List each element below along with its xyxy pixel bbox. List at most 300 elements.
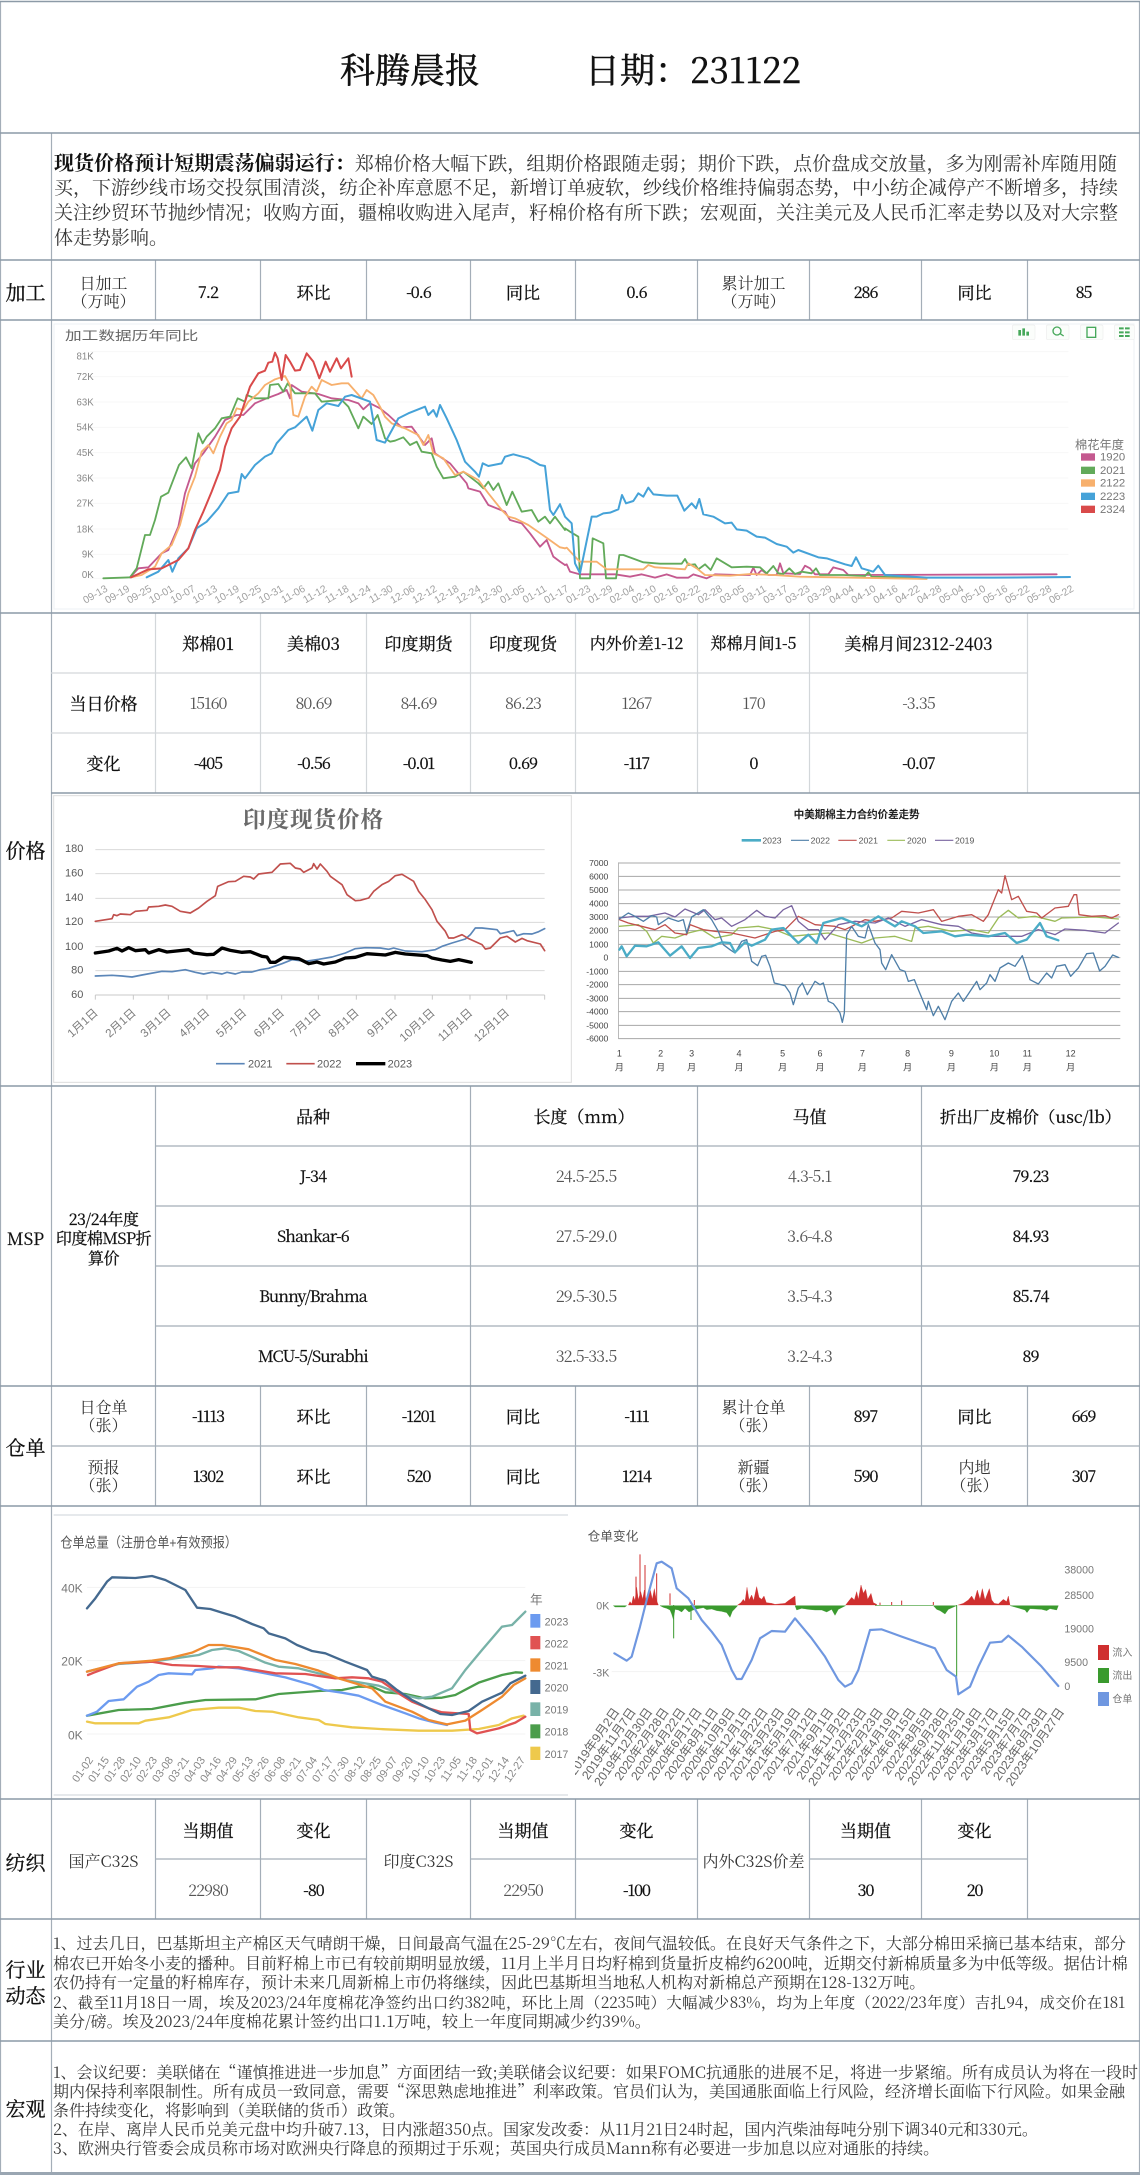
- panel: MSP table: 84.93: [1013, 1224, 1048, 1247]
- axes: 5月1日: [214, 1006, 249, 1040]
- x axis date labels: 11-12: [301, 584, 329, 606]
- axes: 2000: [589, 926, 609, 936]
- legend: 棉花年度: [1075, 437, 1124, 452]
- axes: 12-01: [470, 1755, 496, 1785]
- axes: 2021年1月22日: [711, 1705, 771, 1783]
- panel: warehouse receipt table: （张）: [950, 1473, 998, 1496]
- axes: -1000: [586, 966, 609, 976]
- MSP description: 算价: [88, 1246, 119, 1269]
- panel: warehouse receipt table: 预报: [87, 1454, 120, 1478]
- axes: 2022年2月23日: [826, 1705, 886, 1783]
- legend: 流入: [1112, 1646, 1132, 1659]
- chart title: 加工数据历年同比: [65, 329, 198, 343]
- axes: 5: [780, 1049, 785, 1059]
- panel: processing row: 286: [854, 280, 877, 303]
- axes: 2021年3月23日: [727, 1705, 787, 1783]
- legend: 2021: [248, 1058, 272, 1070]
- axes: 2019年12月30日: [591, 1705, 655, 1789]
- y axis gridlines and labels: 0K: [82, 570, 94, 581]
- x axis date labels: 09-25: [125, 584, 154, 606]
- axes: 1: [617, 1049, 622, 1059]
- panel: warehouse receipt table: （张）: [729, 1413, 778, 1436]
- axes: 2021年9月1日: [780, 1705, 836, 1777]
- MSP description: [56, 1207, 152, 1269]
- axes: 月: [990, 1063, 999, 1073]
- axes: 月: [615, 1063, 624, 1073]
- x axis date labels: 12-18: [433, 584, 461, 606]
- panel: textile table: 内外C32S价差: [703, 1849, 804, 1872]
- price table: -3.35: [902, 691, 935, 714]
- panel: MSP table: MCU-5/Surabhi: [258, 1344, 368, 1367]
- axes: 08-25: [358, 1755, 384, 1785]
- line chart: India spot price: [53, 795, 572, 1083]
- x axis date labels: 10-19: [213, 584, 242, 606]
- section label: industry news: [6, 1954, 46, 2009]
- axes: 2022年11月25日: [905, 1705, 968, 1788]
- series 2019: [619, 906, 1118, 940]
- panel: processing row: -0.6: [406, 280, 431, 303]
- series 2023: [619, 916, 1058, 958]
- chart title: 印度现货价格: [243, 803, 383, 835]
- axes: 4: [736, 1049, 742, 1059]
- legend: 2019: [955, 835, 974, 845]
- axes: [566, 1564, 1094, 1789]
- panel: textile table: 变化: [958, 1817, 992, 1842]
- price table: -0.56: [297, 751, 330, 774]
- legend: [1075, 437, 1125, 516]
- series 2020: [87, 1576, 525, 1715]
- x axis date labels: 12-24: [454, 584, 483, 606]
- x axis date labels: 04-16: [872, 584, 900, 606]
- axes: 2021年12月23日: [805, 1705, 869, 1789]
- price table: -117: [624, 751, 649, 774]
- text block: macro news: 2、在岸、离岸人民币兑美元盘中均升破7.13，日内涨超350点。国家发改委：从11月21日24时起，国内汽柴油每吨分别下调340元和330元。: [53, 2117, 1038, 2140]
- panel: warehouse receipt table: 新疆: [737, 1454, 770, 1478]
- y axis gridlines and labels: 81K: [76, 351, 94, 362]
- axes: [65, 843, 545, 1045]
- summary text block: 体走势影响。: [54, 223, 168, 250]
- axes: 月: [947, 1063, 956, 1073]
- axes: 6月1日: [251, 1006, 287, 1040]
- axes: 8: [905, 1049, 910, 1059]
- report date: 日期：231122: [585, 44, 801, 94]
- section label: industry news: 行业: [6, 1954, 46, 1983]
- axes: 01-02: [70, 1755, 96, 1785]
- axes: 9500: [1064, 1657, 1088, 1669]
- axes: 03-21: [166, 1755, 192, 1785]
- legend: 1920: [1100, 452, 1125, 464]
- axes: 2021年7月12日: [760, 1705, 820, 1783]
- axes: 7月1日: [288, 1006, 324, 1040]
- text block: industry news: 美分/磅。埃及2023/24年度棉花累计签约出口1.1万吨，较上一年度同期减少约39%。: [53, 2009, 651, 2032]
- price table: 15160: [190, 691, 226, 714]
- legend: 2023: [762, 835, 782, 845]
- x axis date labels: 06-22: [1047, 584, 1076, 606]
- panel: textile table: -100: [623, 1878, 650, 1901]
- axes: 05-13: [230, 1755, 256, 1785]
- axes: 1月1日: [65, 1006, 101, 1040]
- price table: 0.69: [509, 751, 537, 774]
- axes: 8月1日: [326, 1006, 362, 1040]
- axes: 2023年7月7日: [978, 1705, 1034, 1777]
- price table: 80.69: [296, 691, 332, 714]
- panel: warehouse receipt table: 同比: [506, 1403, 540, 1428]
- panel: warehouse receipt table: 环比: [296, 1403, 330, 1428]
- axes: 月: [656, 1063, 665, 1073]
- axes: 9: [949, 1049, 954, 1059]
- panel: textile table: 印度C32S: [384, 1849, 453, 1872]
- x axis date labels: 01-17: [542, 584, 571, 606]
- legend: 仓单: [1112, 1693, 1132, 1706]
- panel: textile table: 22980: [188, 1878, 228, 1901]
- text block: macro news: [53, 2060, 1138, 2159]
- text block: macro news: 1、会议纪要：美联储在“谨慎推进进一步加息”方面团结一致;美联储会议纪要：如果FOMC抗通胀的进展不足，将进一步紧缩。所有成员认为将在一段时: [53, 2060, 1138, 2083]
- panel: MSP table: 3.5-4.3: [787, 1284, 832, 1307]
- legend: 2020: [545, 1683, 568, 1695]
- summary text block: 买，下游纱线市场交投氛围清淡，纺企补库意愿不足，新增订单疲软，纱线价格维持偏弱态势，中小纺企减停产不断增多，持续: [54, 173, 1118, 200]
- section label: textile: 纺织: [6, 1847, 46, 1876]
- axes: 3月1日: [138, 1006, 174, 1040]
- panel: MSP table: Bunny/Brahma: [259, 1284, 367, 1307]
- panel: warehouse receipt table: （张）: [79, 1413, 128, 1436]
- x axis date labels: 10-01: [147, 584, 176, 606]
- panel: warehouse receipt table: 同比: [958, 1403, 992, 1428]
- price table: 当日价格: [70, 690, 138, 715]
- x axis date labels: 09-13: [81, 584, 110, 606]
- x axis date labels: 01-23: [564, 584, 593, 606]
- MSP description: 23/24年度: [69, 1207, 138, 1230]
- axes: 月: [815, 1063, 825, 1073]
- x axis date labels: 12-12: [411, 584, 439, 606]
- axes: 1000: [589, 939, 609, 949]
- panel: textile table: 当期值: [840, 1817, 891, 1842]
- axes: 2021年5月19日: [743, 1705, 803, 1783]
- x axis date labels: 01-29: [586, 584, 615, 606]
- y axis gridlines and labels: 45K: [76, 448, 94, 459]
- legend: 2022: [317, 1058, 341, 1070]
- series lines: [619, 876, 1118, 1022]
- panel: textile table: [6, 1817, 992, 1901]
- price table: 84.69: [401, 691, 436, 714]
- price table: 170: [742, 691, 765, 714]
- panel: textile table: 国产C32S: [69, 1849, 138, 1872]
- y axis gridlines and labels: 18K: [76, 524, 94, 535]
- axes: 月: [1066, 1063, 1075, 1073]
- x axis date labels: 11-30: [367, 584, 395, 606]
- panel: warehouse receipt table: -111: [624, 1404, 649, 1427]
- x axis date labels: 02-10: [630, 584, 659, 606]
- y axis gridlines and labels: 63K: [76, 397, 94, 408]
- legend: 2021: [859, 835, 878, 845]
- series 2122: [131, 376, 927, 579]
- axes: 10-10: [406, 1755, 432, 1785]
- panel: processing row: （万吨）: [721, 289, 786, 312]
- axes: -2000: [586, 980, 609, 990]
- section label: macro: 宏观: [6, 2093, 46, 2122]
- x axis date labels: 11-18: [323, 584, 351, 606]
- x axis date labels: 02-28: [696, 584, 725, 606]
- axes: 4月1日: [177, 1006, 212, 1040]
- x axis date labels: 01-05: [498, 584, 527, 606]
- legend: [742, 835, 974, 845]
- legend: 2017: [545, 1749, 568, 1761]
- x axis date labels: 05-16: [981, 584, 1010, 606]
- x axis date labels: 03-05: [718, 584, 747, 606]
- axes: 80: [71, 965, 83, 977]
- axes: 2: [658, 1049, 663, 1059]
- panel: textile table: -80: [303, 1878, 324, 1901]
- series 2023: [87, 1667, 447, 1725]
- axes: 5000: [589, 885, 609, 895]
- price table: 内外价差1-12: [590, 631, 683, 654]
- series 2022: [95, 863, 545, 951]
- axes: -6000: [586, 1034, 609, 1044]
- series 1920: [130, 385, 1057, 578]
- section label: warehouse receipts: 仓单: [6, 1432, 46, 1461]
- x axis date labels: 04-04: [828, 584, 856, 606]
- price table: [70, 630, 993, 775]
- x axis date labels: 10-31: [257, 584, 286, 606]
- axes: 120: [65, 916, 83, 928]
- panel: warehouse receipt table: 环比: [296, 1463, 330, 1488]
- panel: warehouse receipt table: 1214: [622, 1464, 651, 1487]
- x axis date labels: 12-06: [389, 584, 417, 606]
- axes: 2023年10月27日: [1003, 1705, 1067, 1789]
- text block: industry news: 2、截至11月18日一周，埃及2023/24年度棉花净签约出口约382吨，环比上周（2235吨）大幅减少83%，均为上年度（2022/23年度）吉扎94，成交价在181: [53, 1991, 1125, 2013]
- legend: 2021: [1100, 465, 1125, 477]
- panel: warehouse receipt table: 累计仓单: [721, 1394, 786, 1418]
- panel: warehouse receipt table: 590: [854, 1464, 877, 1487]
- legend: 2019: [545, 1705, 568, 1717]
- x axis date labels: 04-22: [894, 584, 922, 606]
- price table: 郑棉01: [182, 630, 234, 655]
- panel: textile table: 变化: [620, 1817, 654, 1842]
- x axis date labels: 05-28: [1025, 584, 1054, 606]
- axes: 100: [65, 941, 83, 953]
- series 2021: [103, 383, 927, 578]
- price table: -0.07: [902, 751, 935, 774]
- axes: 140: [65, 892, 83, 904]
- x axis date labels: 10-25: [235, 584, 264, 606]
- panel: textile table: 30: [858, 1878, 873, 1901]
- panel: processing row: 同比: [958, 279, 992, 304]
- axes: 2020年6月17日: [645, 1705, 705, 1783]
- panel: MSP table: 85.74: [1013, 1284, 1048, 1307]
- axes: 06-08: [262, 1755, 288, 1785]
- axes: 180: [65, 843, 83, 855]
- section label: industry news: 动态: [6, 1980, 46, 2009]
- text block: macro news: 期内保持利率限制性。所有成员一致同意，需要“深思熟虑地推进”利率政策。官员们认为，美国通胀面临上行风险，经济增长面临下行风险。如果金融: [53, 2079, 1125, 2102]
- panel: warehouse receipt table: 内地: [958, 1454, 990, 1478]
- series 2017: [87, 1708, 524, 1731]
- y axis gridlines and labels: [76, 351, 1068, 581]
- report name: 科腾晨报: [340, 44, 480, 94]
- price table: 美棉月间2312-2403: [844, 630, 993, 655]
- x axis date labels: [81, 584, 1076, 606]
- y axis gridlines and labels: 27K: [76, 499, 94, 510]
- axes: 02-23: [134, 1755, 160, 1785]
- summary text block: 关注纱贸环节抛纱情况；收购方面，疆棉收购进入尾声，籽棉价格有所下跌；宏观面，关注美元及人民币汇率走势以及对大宗整: [54, 198, 1118, 225]
- price table: 郑棉月间1-5: [710, 631, 796, 654]
- legend: 2023: [545, 1616, 568, 1628]
- series 2022: [619, 910, 1118, 1022]
- axes: 07-04: [294, 1755, 320, 1785]
- axes: 月: [858, 1063, 867, 1073]
- panel: MSP table: 长度（mm）: [533, 1103, 635, 1128]
- x axis date labels: 12-30: [476, 584, 505, 606]
- series 2021: [87, 1645, 525, 1724]
- series 2018: [87, 1672, 522, 1716]
- legend: 2023: [388, 1058, 412, 1070]
- title: [340, 44, 801, 94]
- axes: 月: [687, 1063, 696, 1073]
- axes: 10月1日: [397, 1006, 438, 1045]
- axes: 0: [604, 953, 609, 963]
- panel: MSP table: 79.23: [1013, 1164, 1048, 1187]
- line chart: historical processing data: [54, 324, 1134, 610]
- axes: 01-28: [102, 1755, 128, 1785]
- axes: 11月1日: [435, 1006, 475, 1044]
- axes: -4000: [586, 1007, 609, 1017]
- panel: MSP table: 品种: [296, 1103, 330, 1128]
- axes: 月: [778, 1063, 787, 1073]
- price table: -405: [194, 751, 222, 774]
- axes: 4000: [589, 899, 609, 909]
- axes: 3: [689, 1049, 694, 1059]
- axes: 11: [1023, 1049, 1032, 1059]
- panel: processing row: [6, 270, 1092, 312]
- price table: 86.23: [505, 691, 541, 714]
- panel: MSP table: 89: [1023, 1344, 1038, 1367]
- axes: 2023年3月17日: [941, 1705, 1001, 1783]
- panel: warehouse receipt table: 日仓单: [79, 1394, 128, 1418]
- x axis date labels: 09-19: [103, 584, 132, 606]
- legend: 年: [530, 1593, 543, 1607]
- axes: 60: [71, 989, 83, 1001]
- price table: 变化: [86, 750, 120, 775]
- x axis date labels: 11-06: [280, 584, 308, 606]
- MSP description: 印度棉MSP折: [56, 1226, 151, 1249]
- axes: 0: [1064, 1681, 1070, 1693]
- axes: 08-12: [342, 1755, 368, 1785]
- outflow bars: [613, 1605, 1058, 1677]
- series 2022: [88, 1662, 525, 1733]
- panel: warehouse receipt table: -1201: [402, 1404, 435, 1427]
- axes: 160: [65, 868, 83, 880]
- axes: 2022年6月15日: [859, 1705, 919, 1783]
- panel: textile table: 20: [967, 1878, 982, 1901]
- price table: 美棉03: [287, 630, 340, 655]
- panel: textile table: 22950: [503, 1878, 543, 1901]
- price table: 印度现货: [489, 630, 557, 655]
- axes: 2022年9月28日: [892, 1705, 952, 1783]
- panel: MSP table: Shankar-6: [277, 1224, 349, 1247]
- inflow bars: [628, 1554, 1010, 1605]
- panel: MSP table: [7, 1103, 1121, 1367]
- panel: warehouse receipt table: [6, 1394, 1096, 1496]
- y axis gridlines and labels: 54K: [76, 423, 94, 434]
- axes: 07-17: [310, 1755, 336, 1785]
- panel: warehouse receipt table: （张）: [79, 1473, 128, 1496]
- x axis date labels: 04-28: [915, 584, 944, 606]
- axes: 28500: [1064, 1590, 1094, 1602]
- warehouse receipts line: [614, 1562, 1058, 1694]
- panel: processing row: 环比: [296, 279, 330, 304]
- axes: 04-29: [214, 1755, 240, 1785]
- price table: 0: [750, 751, 757, 774]
- price table: 1267: [621, 691, 652, 714]
- legend: 2022: [545, 1638, 568, 1650]
- panel: warehouse receipt table: 同比: [506, 1463, 540, 1488]
- axes: 06-21: [278, 1755, 304, 1785]
- legend: 2122: [1100, 478, 1125, 490]
- chart title: 仓单总量（注册仓单+有效预报）: [60, 1535, 237, 1551]
- panel: MSP table: 29.5-30.5: [556, 1284, 616, 1307]
- panel: textile table: 当期值: [182, 1817, 234, 1842]
- text block: industry news: 棉农已开始冬小麦的播种。目前籽棉上市已有较前期明显放缓，11月上半月日均籽棉到货量折皮棉约6200吨，近期交付新棉质量多为中低等级。据估计棉: [53, 1951, 1128, 1974]
- axes: 2月1日: [103, 1006, 139, 1040]
- toolbar icons: [1012, 325, 1134, 340]
- axes: [586, 858, 1120, 1073]
- series 2023: [95, 948, 471, 964]
- axes: 19000: [1064, 1623, 1094, 1635]
- legend: 2018: [545, 1727, 568, 1739]
- section label: processing: 加工: [6, 277, 46, 306]
- legend: 流出: [1112, 1669, 1132, 1682]
- panel: MSP table: 24.5-25.5: [556, 1164, 616, 1187]
- axes: -3000: [586, 993, 609, 1003]
- axes: 月: [1023, 1063, 1032, 1073]
- axes: 10-23: [422, 1755, 448, 1785]
- axes: 12: [1066, 1049, 1076, 1059]
- panel: processing row: 85: [1076, 280, 1091, 303]
- axes: -5000: [586, 1020, 609, 1030]
- axes: 11-18: [455, 1755, 480, 1784]
- axes: 2020年4月22日: [628, 1705, 688, 1783]
- panel: MSP table: 3.6-4.8: [787, 1224, 832, 1247]
- panel: warehouse receipt table: -1113: [192, 1404, 224, 1427]
- axes: 11-05: [439, 1755, 464, 1784]
- axes: 12-14: [486, 1755, 512, 1785]
- axes: 6: [817, 1049, 823, 1059]
- panel: warehouse receipt table: 897: [854, 1404, 877, 1427]
- legend: [530, 1593, 568, 1761]
- axes: 2020年2月28日: [612, 1705, 672, 1783]
- panel: processing row: 同比: [506, 279, 540, 304]
- axes: 2020年8月11日: [661, 1705, 721, 1782]
- x axis date labels: 10-07: [169, 584, 198, 606]
- axes: -3K: [593, 1668, 609, 1680]
- axes: [61, 1581, 528, 1785]
- axes: 月: [734, 1063, 744, 1073]
- y axis gridlines and labels: 72K: [76, 372, 94, 383]
- axes: 04-03: [182, 1755, 208, 1785]
- panel: MSP table: 折出厂皮棉价（usc/lb）: [940, 1104, 1121, 1128]
- chart title: 仓单变化: [588, 1529, 639, 1544]
- text block: macro news: 条件持续变化，将影响到（美联储的货币）政策。: [53, 2098, 405, 2121]
- axes: 10: [989, 1049, 999, 1059]
- price table: 印度期货: [384, 630, 452, 655]
- text block: industry news: 农仍持有一定量的籽棉库存，预计未来几周新棉上市仍将继续，因此巴基斯坦当地私人机构对新棉总产预期在128-132万吨。: [53, 1970, 925, 1993]
- x axis date labels: 02-16: [652, 584, 681, 606]
- panel: warehouse receipt table: 307: [1072, 1464, 1095, 1487]
- legend: 2022: [811, 835, 830, 845]
- axes: 2020年12月1日: [694, 1705, 754, 1783]
- legend: [1098, 1645, 1132, 1706]
- x axis date labels: 05-22: [1003, 584, 1032, 606]
- x axis date labels: 03-23: [784, 584, 812, 606]
- axes: 2023年1月18日: [925, 1705, 985, 1783]
